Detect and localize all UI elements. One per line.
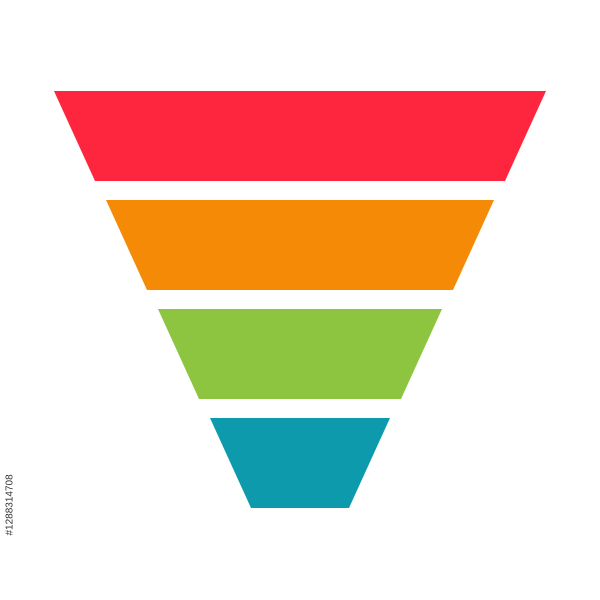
funnel band 4: teal <box>210 418 390 508</box>
vertical id text: #1288314708 <box>4 474 16 536</box>
funnel band 2: orange <box>106 200 494 290</box>
funnel band 1: red <box>54 91 546 181</box>
funnel band 3: green <box>158 309 442 399</box>
